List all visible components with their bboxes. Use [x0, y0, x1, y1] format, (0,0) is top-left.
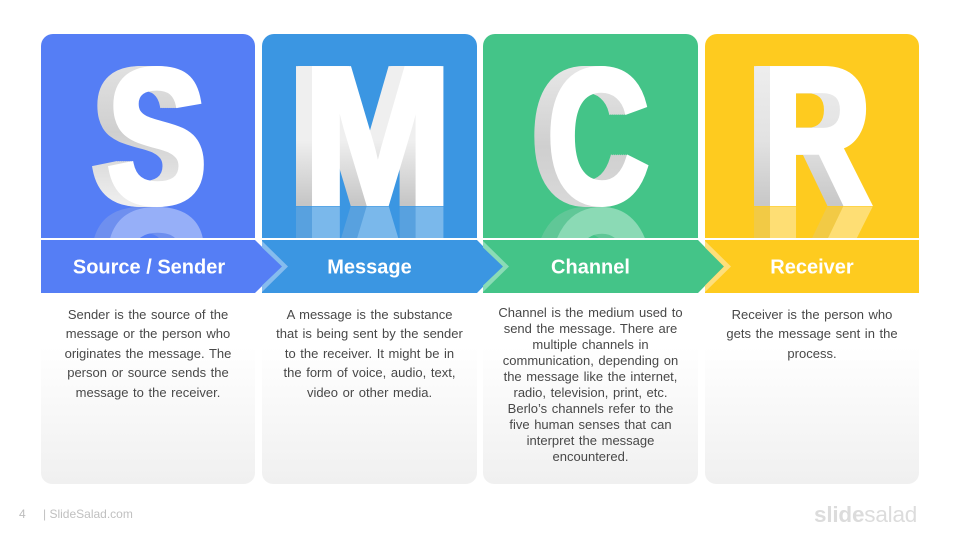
- letter R reflection: R: [750, 166, 861, 384]
- letter M: M: [292, 27, 443, 246]
- text: message description: that is being sent by the sender: [276, 326, 463, 341]
- letter M: M: [290, 27, 441, 246]
- band: Source / Sender arrow: Source / Sender: [73, 256, 225, 278]
- band: Source / Sender arrow: [41, 240, 288, 293]
- letter R: R: [752, 28, 863, 246]
- text: channel description: send the message. There are: [504, 321, 677, 336]
- text: channel description: multiple channels in: [532, 337, 649, 352]
- text: message description: [276, 307, 463, 400]
- text: source description: message or the person who: [66, 326, 230, 341]
- letter M reflection: M: [298, 166, 449, 385]
- text: source description: person or source sends the: [67, 365, 229, 380]
- text: source description: [65, 307, 231, 400]
- letter C: C: [538, 29, 642, 243]
- letter S reflection: S: [98, 170, 200, 385]
- panel: receiver description: [705, 293, 919, 484]
- text: receiver description: Receiver is the person who: [732, 307, 892, 322]
- logo wordmark: slidesalad: [814, 502, 917, 527]
- text: channel description: Berlo’s channels refer to the: [508, 401, 673, 416]
- text: message description: to the receiver. It might be in: [285, 346, 454, 361]
- panel: message description: [262, 293, 477, 484]
- page number: 4: [19, 507, 26, 521]
- text: channel description: five human senses that can: [509, 417, 672, 432]
- letter R: R: [756, 28, 867, 246]
- SMCR graphic: [41, 34, 919, 293]
- letter S: S: [102, 29, 204, 244]
- letter C: C: [536, 29, 640, 243]
- band: Message arrow: Message: [327, 256, 412, 278]
- text: channel description: the message like the internet,: [504, 369, 677, 384]
- letter M reflection: M: [290, 166, 441, 385]
- letter C: C: [534, 29, 638, 243]
- panel: R tile: [705, 34, 919, 238]
- letter C reflection: C: [530, 171, 634, 385]
- letter S reflection: S: [90, 170, 192, 385]
- letter S: S: [90, 29, 192, 244]
- letter R: R: [748, 28, 859, 246]
- panel: S tile: [41, 34, 255, 238]
- letter C: C: [542, 29, 646, 243]
- text: channel description: encountered.: [553, 449, 628, 464]
- letter M reflection: M: [302, 166, 453, 385]
- letter M: M: [300, 27, 451, 246]
- letter C reflection: C: [542, 171, 646, 385]
- letter R: R: [746, 28, 857, 246]
- letter M: M: [288, 27, 439, 246]
- letter C reflection: C: [538, 171, 642, 385]
- text: channel description: communication, depending on: [503, 353, 678, 368]
- letter M: M: [286, 27, 437, 246]
- letter C: C: [546, 29, 650, 243]
- letter S reflection: S: [94, 170, 196, 385]
- panel: C tile: [483, 34, 698, 238]
- text: message description: video or other media.: [307, 385, 432, 400]
- letter C: C: [540, 29, 644, 243]
- letter S: S: [96, 29, 198, 244]
- letter C: C: [530, 29, 634, 243]
- panel: channel description: [483, 293, 698, 484]
- letter C reflection: [541, 207, 645, 238]
- letter M reflection: M: [286, 166, 437, 385]
- letter S: S: [104, 29, 206, 244]
- text: source description: originates the message. The: [65, 346, 231, 361]
- letter R: R: [754, 28, 865, 246]
- letter R reflection: [754, 206, 873, 238]
- text: receiver description: [726, 307, 898, 361]
- letter R: R: [758, 28, 869, 246]
- letter S reflection: S: [106, 170, 208, 385]
- letter M: M: [298, 27, 449, 246]
- letter R reflection: R: [762, 166, 873, 384]
- text: channel description: interpret the message: [527, 433, 654, 448]
- text: source description: Sender is the source of the: [68, 307, 228, 322]
- text: source description: message to the receiver.: [76, 385, 220, 400]
- letter S: S: [98, 29, 200, 244]
- letter R reflection: R: [754, 166, 865, 384]
- letter M: M: [302, 27, 453, 246]
- band: Receiver: Receiver: [770, 256, 854, 278]
- text: message description: the form of voice, audio, text,: [284, 365, 455, 380]
- letter R: R: [762, 28, 873, 246]
- panel: source description: [41, 293, 255, 484]
- letter S: S: [94, 29, 196, 244]
- letter R reflection: R: [746, 166, 857, 384]
- letter C reflection: C: [534, 171, 638, 385]
- footer site name: | SlideSalad.com: [43, 507, 133, 521]
- panel: M tile: [262, 34, 477, 238]
- letter C: C: [532, 29, 636, 243]
- letter S reflection: S: [102, 170, 204, 385]
- letter S: S: [106, 29, 208, 244]
- text: channel description: radio, television, print, etc.: [513, 385, 668, 400]
- text: message description: A message is the substance: [287, 307, 452, 322]
- letter C: C: [544, 29, 648, 243]
- letter M reflection: [296, 206, 444, 238]
- letter R: R: [750, 28, 861, 246]
- band: Channel arrow: Channel: [551, 256, 630, 278]
- letter S: S: [92, 29, 194, 244]
- text: channel description: Channel is the medium used to: [498, 305, 683, 320]
- band: Channel arrow: [483, 240, 731, 293]
- letter S: S: [100, 29, 202, 244]
- text: receiver description: gets the message sent in the: [726, 326, 898, 341]
- letter M: M: [296, 27, 447, 246]
- text: receiver description: process.: [787, 346, 837, 361]
- letter S reflection: [94, 207, 203, 238]
- letter R: R: [760, 28, 871, 246]
- letter R reflection: R: [758, 166, 869, 384]
- band: Receiver: [705, 240, 919, 293]
- letter M reflection: M: [294, 166, 445, 385]
- letter M: M: [294, 27, 445, 246]
- letter C reflection: C: [546, 171, 650, 385]
- band: Message arrow: [262, 240, 509, 293]
- text: channel description: [498, 305, 683, 464]
